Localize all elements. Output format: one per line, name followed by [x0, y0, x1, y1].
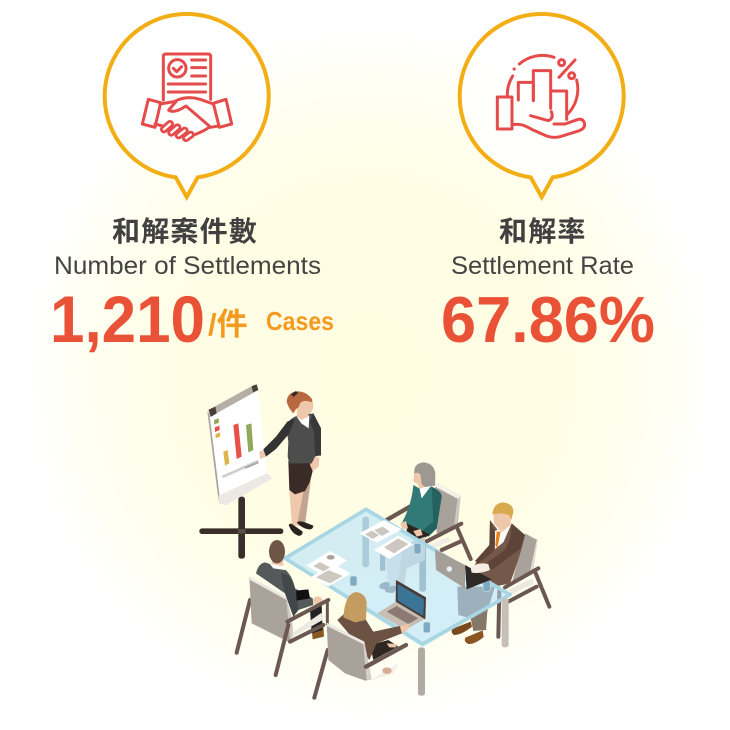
icon: hand holding bar chart with percent: [497, 55, 585, 137]
chair: front middle seat back and arm: [327, 623, 406, 681]
label: Settlement Rate: Settlement Rate: [451, 252, 634, 280]
panel: settlement rate: [441, 14, 655, 356]
rear table legs: [362, 517, 426, 593]
front table legs: [418, 598, 509, 696]
illustration: flip chart: [199, 384, 283, 559]
label: Number of Settlements: Number of Settlements: [54, 252, 321, 280]
unit: Cases: Cases: [266, 306, 334, 336]
speech bubble: settlements: [105, 14, 269, 197]
rear people and chairs: [387, 462, 549, 644]
person: teal woman's legs: [379, 537, 425, 593]
icon: handshake and document: [142, 54, 232, 138]
unit: /件: /件: [208, 307, 248, 342]
person: presenter woman: [259, 391, 321, 536]
laptop: silver, back view: [435, 549, 492, 589]
heading: 和解案件數: 和解案件數: [112, 216, 258, 247]
speech bubble: rate: [460, 14, 624, 197]
chair: front left, rear parts: [237, 600, 327, 653]
front people and chairs: [237, 540, 410, 698]
items on table: [306, 520, 509, 696]
documents: [306, 520, 413, 587]
value: 1,210: 1,210: [50, 282, 205, 356]
flip chart stand: [199, 497, 283, 559]
flip chart board: [207, 384, 273, 506]
chair: front left seat and arm: [249, 577, 328, 675]
chair: teal woman: [387, 482, 471, 559]
panel: number of settlements: [50, 14, 334, 356]
person: blonde woman: [337, 592, 410, 660]
heading: 和解率: 和解率: [499, 216, 587, 247]
table top: [283, 507, 512, 647]
person: man's legs: [452, 587, 495, 644]
chair: brown-suit man: [498, 533, 549, 637]
value: 67.86%: 67.86%: [441, 283, 655, 356]
illustration: meeting table scene: [237, 462, 549, 698]
person: woman in teal: [400, 462, 442, 541]
person: man in brown suit: [465, 502, 525, 587]
water glasses: [350, 543, 490, 633]
person: man with dark suit: [256, 540, 322, 617]
laptop: open blue screen: [377, 580, 426, 630]
chair: front middle rear parts: [314, 650, 398, 698]
